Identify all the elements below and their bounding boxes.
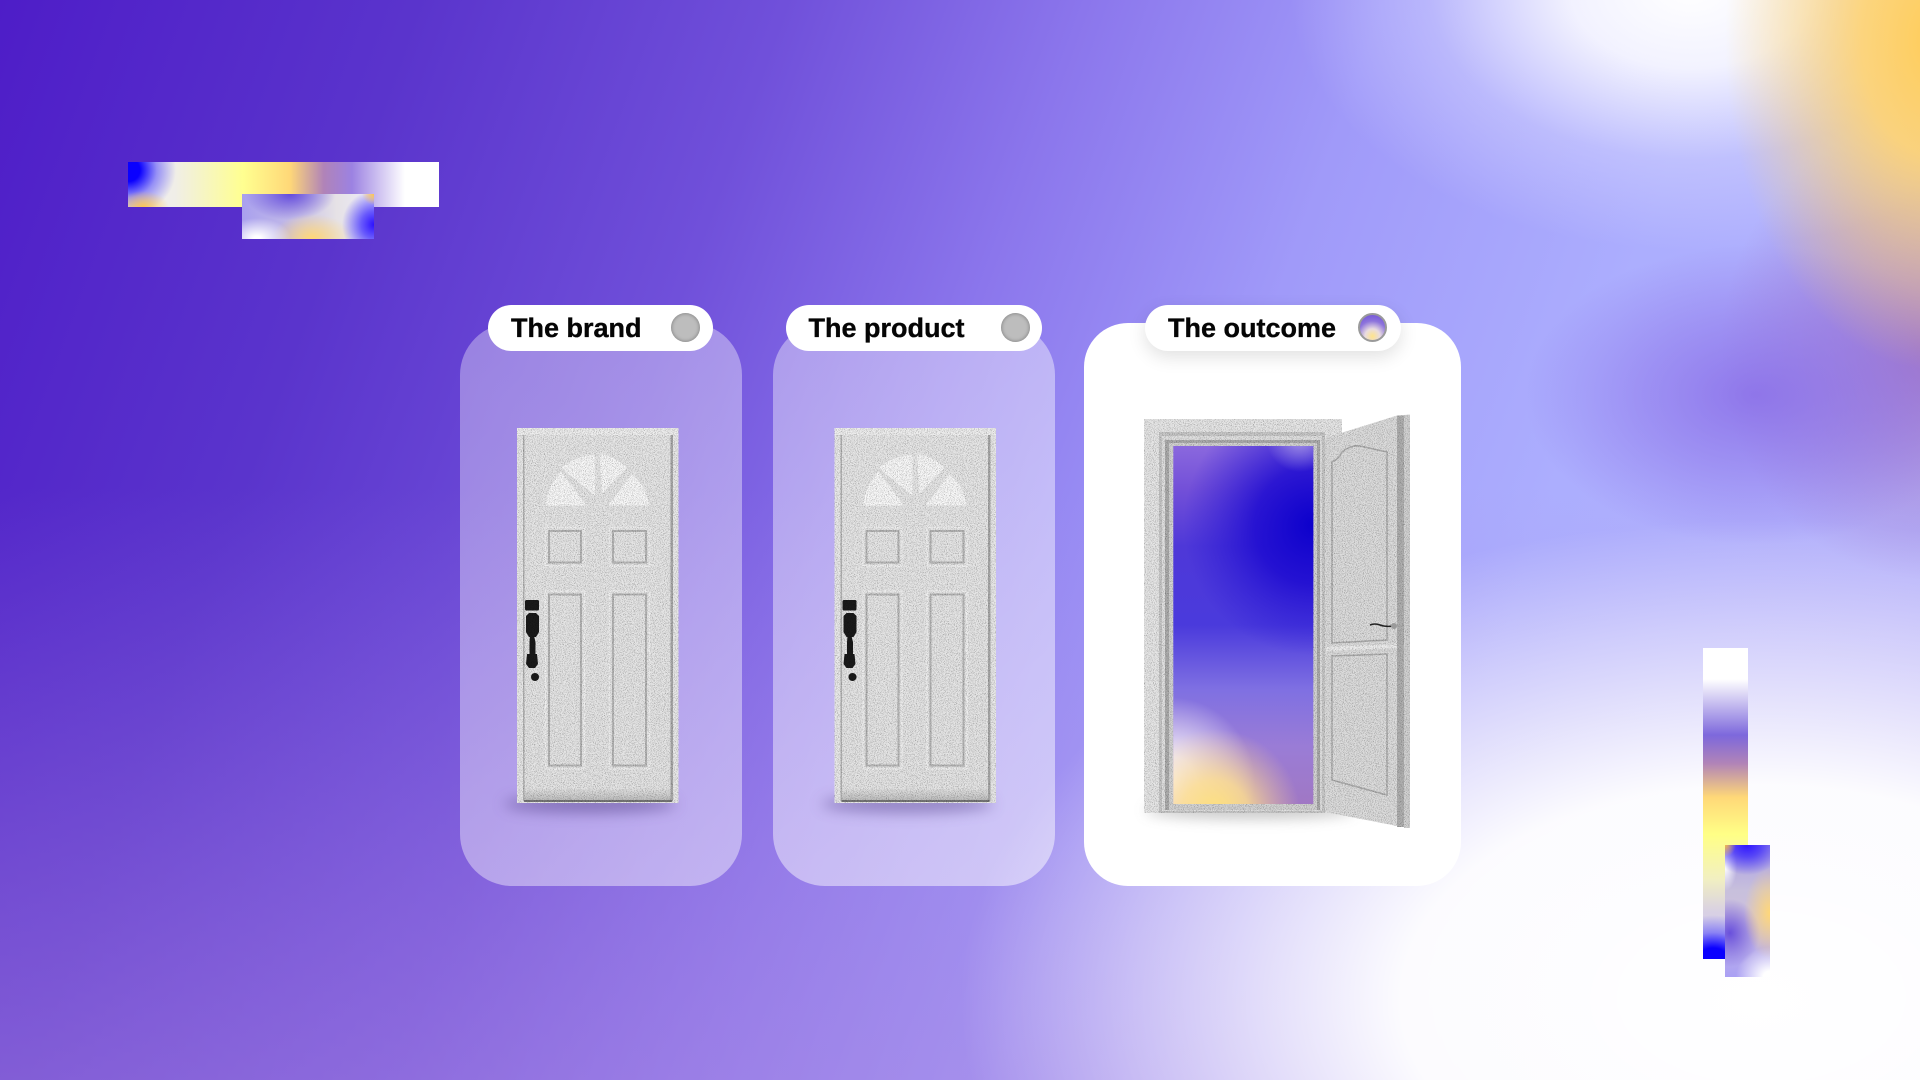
decorative gradient bar: bottom tall — [1703, 648, 1748, 959]
panel: the brand — [460, 323, 742, 886]
door leaf — [1325, 414, 1410, 828]
indicator dot — [1000, 313, 1030, 342]
panel: the product — [773, 323, 1055, 886]
label: the outcome — [1145, 304, 1401, 350]
heading: The outcome — [1168, 312, 1336, 342]
decorative gradient bar: bottom short — [1725, 845, 1770, 977]
decorative gradient bar: top short — [242, 194, 374, 238]
decorative gradient bar: top long — [128, 162, 439, 207]
door: the brand — [504, 428, 678, 813]
indicator dot — [671, 313, 700, 342]
label: the brand — [488, 304, 713, 350]
opening with gradient — [1173, 446, 1313, 804]
heading: The brand — [511, 312, 642, 342]
indicator dot: gradient — [1358, 313, 1387, 342]
door: the product — [822, 428, 996, 813]
heading: The product — [808, 312, 964, 342]
label: the product — [786, 304, 1042, 350]
door frame — [1144, 419, 1342, 813]
door handle — [1370, 624, 1394, 626]
door: the outcome (open) — [1144, 414, 1410, 828]
panel: the outcome — [1084, 323, 1461, 886]
